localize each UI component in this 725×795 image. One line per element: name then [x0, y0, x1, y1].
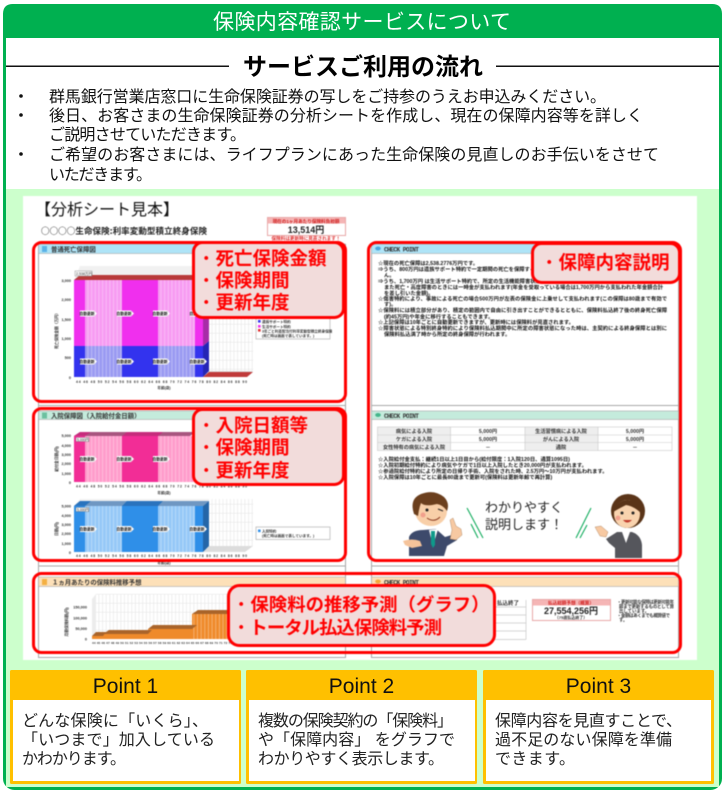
- panel: check point 1: ☆上記保障は10年ごとに自動更新できますが、更新時には保険料が見直されます。: [378, 318, 574, 326]
- title bar: 保険内容確認サービスについて: [213, 11, 511, 34]
- coverage table: 5,000円: [479, 436, 497, 443]
- point 2 card: [246, 670, 477, 784]
- panel: check point 3: CHECK POINT: [384, 580, 419, 586]
- point 1 card: かわかります。: [22, 750, 126, 768]
- coverage table: 女性特有の病気による入院: [383, 443, 446, 451]
- coverage table: ケガによる入院: [396, 435, 433, 443]
- side note: ・金額はあくまでも概算値で: [617, 612, 671, 619]
- monthly premium box: [268, 218, 346, 242]
- hospital notes: ☆入院保障は10年ごとに最長80歳まで更新可(保険料は更新年齢で再計算): [378, 473, 552, 481]
- icon: businesswoman: [595, 494, 645, 558]
- analysis sheet sample: [23, 196, 697, 660]
- chart: hospital blue: 年齢(歳): [157, 560, 171, 565]
- renewal tags: 自動更新: [189, 311, 205, 316]
- chart: hospital blue: 0: [69, 551, 71, 555]
- hospital notes: ☆入院給付金支払：継続1日以上1日目から(給付限度：1入院120日、通算1095日): [378, 455, 570, 463]
- chart: hospital pink: 4,000: [61, 444, 71, 448]
- total premium box: 27,554,256円: [544, 606, 598, 616]
- coverage table: [378, 427, 672, 451]
- point 2 card: わかりやすく表示します。: [258, 750, 444, 768]
- legend: hospital: (死亡時は画面で表しています。): [262, 533, 315, 538]
- chart: death coverage: 500: [65, 356, 71, 360]
- chart: hospital blue: 日額(円): [54, 521, 59, 536]
- hospital notes: ☆入院初期給付特約により病気やケガで1日以上入院したとき20,000円が支払われます。: [378, 461, 587, 469]
- chart: death coverage: 0: [69, 376, 71, 380]
- chart: hospital pink: 44 46 48 50 52 54 56 58 60 62 64 66 68 70 72 74 76 78 80 82 84 86 88 90: [76, 484, 247, 488]
- panel: check point 1: ☆傷害特約により、事故による死亡の場合500万円が左表の保険金に上乗せして支払われます(この保障は80歳まで有効で: [378, 294, 667, 302]
- renewal tags: [79, 310, 207, 364]
- chart: premium trend: 0: [85, 638, 87, 642]
- point 3 card: できます。: [495, 750, 575, 768]
- coverage table: 病気による入院: [396, 427, 433, 435]
- callout: death benefit: ・保険期間: [197, 270, 290, 291]
- chart: death coverage: 年齢(歳): [157, 385, 171, 390]
- chart: hospital blue: 5,000: [61, 504, 71, 508]
- sheet subtitle: ○○○○生命保険:利率変動型積立終身保険: [41, 225, 207, 237]
- point 3 card: 過不足のない保障を準備: [495, 731, 672, 749]
- renewal tags: 自動更新: [152, 359, 168, 364]
- renewal tags: 自動更新: [152, 311, 168, 316]
- panel: check point 2: [372, 411, 678, 481]
- coverage table: がんによる入院: [543, 435, 580, 443]
- coverage table: 通院: [556, 443, 567, 451]
- point 1 card: Point 1: [93, 675, 158, 698]
- panel: check point 1: CHECK POINT: [384, 246, 419, 254]
- bullet list: 群馬銀行営業店窓口に生命保険証券の写しをご持参のうえお申込みください。: [49, 88, 606, 106]
- coverage table: 5,000円: [626, 436, 644, 443]
- chart: death coverage: 死亡保険金額（万円）: [54, 311, 59, 349]
- total premium box: 払込総額予想（概算）: [548, 600, 594, 606]
- callout: premium forecast: ・トータル払込保険料予測: [232, 617, 442, 638]
- bullet list: ご希望のお客さまには、ライフプランにあった生命保険の見直しのお手伝いをさせて: [49, 146, 659, 164]
- accent lines: [467, 508, 591, 538]
- callout: hospital benefit: ・保険期間: [197, 437, 290, 458]
- panel: death coverage header: 普通死亡保障図: [51, 244, 96, 254]
- panel outlines: [38, 244, 679, 658]
- legend: hospital: 入院特約: [262, 528, 277, 534]
- panel: death coverage header: [38, 244, 346, 254]
- coverage table: 生活習慣病による入院: [535, 427, 588, 435]
- callout: premium forecast: [228, 586, 494, 646]
- panel: check point 1: ん。: [384, 272, 395, 279]
- chart: premium trend: 50,000: [75, 627, 87, 631]
- chart: death coverage: 1,500: [61, 318, 71, 322]
- callout: death benefit: ・更新年度: [197, 292, 290, 313]
- chart: hospital pink: 3,000: [61, 453, 71, 457]
- bullet list: [19, 88, 659, 184]
- chart: hospital pink: 給付金日額(円): [54, 446, 59, 472]
- coverage table: －: [632, 445, 638, 451]
- legend: death coverage: 生活サポート特約: [262, 324, 291, 329]
- callout: hospital benefit: ・入院日額等: [197, 415, 308, 436]
- chart: premium trend: [64, 594, 296, 645]
- monthly premium box: 現在の1ヶ月あたり保険料負担額: [273, 218, 340, 225]
- point 3 card: 保障内容を見直すことで、: [495, 712, 682, 730]
- sheet label: 【分析シート見本】: [35, 201, 179, 219]
- coverage table: －: [485, 445, 491, 451]
- panel: check point 1: また死亡・高度障害のときには一時金が支払われます(年金を受取っている場合は1,700万円から支払われた年金額合計: [384, 283, 664, 291]
- title bar: [3, 4, 722, 38]
- monthly premium box: 保険料は更新時に見直されます！: [272, 235, 340, 242]
- renewal tags: 自動更新: [189, 359, 205, 364]
- point 2 card: 複数の保険契約の「保険料」: [258, 712, 453, 730]
- chart: death coverage: 3,000: [61, 279, 71, 283]
- coverage table: 5,000円: [626, 428, 644, 435]
- chart: hospital blue: 自動更新: [152, 526, 168, 532]
- legend: death coverage: 3年ごと利差配当付利率変動型積立終身保険: [262, 328, 333, 334]
- callout: coverage explanation: ・保障内容説明: [540, 252, 670, 273]
- red highlight frames: [34, 242, 680, 652]
- panel: check point 1: ⇒うち、800万円は遺族サポート特約で一定期間の死亡を保障するもので、保険期間満了時の満期金はありませ: [378, 265, 641, 273]
- panel: check point 1: ☆障害状態による特別終身特約により保険料払込期間中に所定の障害状態になった時は、主契約による終身保障とは別に: [378, 324, 667, 332]
- payment table: 払込終了: [497, 599, 519, 607]
- panel: premium trend header: [38, 577, 346, 586]
- point 2 card: や「保障内容」 をグラフで: [258, 731, 455, 749]
- panel: check point 1: ☆現在の死亡保障は2,538.2776万円です。: [378, 259, 478, 267]
- point 2 card: Point 2: [329, 675, 394, 698]
- point 1 card: 「いつまで」加入している: [22, 731, 215, 749]
- chart: hospital blue: 自動更新: [79, 526, 95, 532]
- panel: check point 2: CHECK POINT: [384, 413, 419, 420]
- chart: hospital pink: 自動更新: [152, 456, 168, 462]
- chart: hospital blue: 5,000円: [77, 508, 89, 512]
- panel: check point 3: [372, 577, 678, 640]
- side note: 出しています。: [619, 608, 649, 614]
- chart: hospital blue: 自動更新: [189, 526, 205, 532]
- chart: hospital blue: 2,000: [61, 532, 71, 536]
- speech text: わかりやすく: [485, 500, 563, 515]
- chart: death coverage: 2,538万円: [76, 272, 93, 276]
- chart: death coverage: 44 46 48 50 52 54 56 58 60 62 64 66 68 70 72 74 76 78 80 82 84 86 88 90: [76, 380, 247, 384]
- legend: death coverage: 遺族サポート特約: [262, 319, 291, 324]
- chart: hospital pink: 0: [69, 481, 71, 485]
- chart: hospital pink: 5,000: [61, 434, 71, 438]
- chart: hospital pink: 年齢(歳): [157, 490, 171, 495]
- chart: death coverage: [54, 266, 253, 390]
- chart: hospital pink: 1,000: [61, 472, 71, 476]
- callout: death benefit: [194, 242, 344, 318]
- legend: death coverage: (死亡時は画面で表しています。): [262, 333, 315, 338]
- speech text: [485, 500, 563, 532]
- side note: 齢まで更新するものとして算: [619, 603, 675, 610]
- bullet list: いただきます。: [49, 166, 152, 184]
- total premium box: [532, 600, 610, 620]
- point 1 card: [10, 670, 241, 784]
- renewal tags: 自動更新: [116, 359, 132, 364]
- panel: check point 1: [372, 244, 678, 338]
- point 3 card: Point 3: [566, 675, 631, 698]
- chart: hospital pink: 自動更新: [79, 456, 95, 462]
- callout: hospital benefit: [194, 410, 344, 484]
- chart: premium trend: 100,000: [73, 616, 87, 620]
- renewal tags: 自動更新: [79, 311, 95, 316]
- panel: check point 1: ⇒うち、1,700万円 は生活サポート特約で、所定の生活機能障害状態になった場合に年金が支払われます。: [378, 277, 630, 285]
- chart: hospital blue: 3,000: [61, 523, 71, 527]
- renewal tags: 自動更新: [116, 311, 132, 316]
- bullet list: ご説明させていただきます。: [49, 126, 246, 144]
- chart: hospital pink: 自動更新: [116, 456, 132, 462]
- hospital notes: ☆参過院給付特約により所定の日帰り手術、入院をされた時、2.5万円～10万円が支払われます。: [378, 467, 608, 475]
- panel: check point 1: す)。: [384, 301, 396, 308]
- callout: coverage explanation: [532, 244, 680, 282]
- chart: death coverage: 1,000: [61, 337, 71, 341]
- legend: death coverage: [256, 316, 333, 339]
- panel: check point 1: (約45万円)や年金に移行することもできます。: [384, 312, 493, 320]
- hospital notes: [378, 455, 608, 481]
- monthly premium box: 13,514円: [288, 225, 324, 235]
- legend: hospital: [256, 527, 330, 540]
- panel: premium trend header: １ヵ月あたりの保険料推移予想: [52, 578, 142, 586]
- chart: hospital blue: 4,000: [61, 514, 71, 518]
- chart: premium trend: 150,000: [73, 606, 87, 610]
- point 3 card: [483, 670, 714, 784]
- speech text: 説明します！: [485, 517, 563, 532]
- chart: hospital blue: [54, 499, 253, 565]
- panel: check point 1: 保険料払込満了時から所定の終身保障が行われます。: [384, 330, 510, 338]
- heading: service flow: サービスご利用の流れ: [243, 53, 483, 81]
- panel: check point 1: を差し引いた金額)。: [384, 289, 433, 297]
- total premium box: （75歳払込終了）: [555, 614, 587, 620]
- side note: す。: [619, 616, 627, 624]
- chart: hospital pink: 2,000: [61, 462, 71, 466]
- panel: hospital coverage header: 入院保障図（入院給付金日額）: [51, 411, 140, 420]
- chart: hospital blue: 44 46 48 50 52 54 56 58 60 62 64 66 68 70 72 74 76 78 80 82 84 86 88 90: [76, 554, 247, 558]
- point 1 card: どんな保険に「いくら」、: [22, 712, 208, 730]
- icon: businessman: [403, 492, 462, 556]
- side note: [617, 598, 675, 624]
- callout: death benefit: ・死亡保険金額: [197, 248, 327, 269]
- chart: premium trend: 月額保険料額(円): [64, 607, 69, 637]
- callout: hospital benefit: ・更新年度: [197, 460, 290, 481]
- payment table: [490, 599, 526, 640]
- panel: hospital coverage header: [38, 411, 346, 420]
- callout: premium forecast: ・保険料の推移予測（グラフ）: [232, 594, 490, 615]
- light green body: [6, 189, 719, 787]
- chart: hospital blue: 1,000: [61, 542, 71, 546]
- panel: check point 1: ☆保険料には積立部分があり、積定の範囲内で自由に引き出すことができるとともに、保険料払込終了後の終身死亡保障: [378, 306, 668, 314]
- coverage table: 5,000円: [479, 428, 497, 435]
- chart: death coverage: 2,000: [61, 298, 71, 302]
- chart: hospital pink: [54, 432, 247, 495]
- chart: hospital pink: 5,000円: [77, 438, 89, 442]
- chart: hospital blue: 自動更新: [116, 526, 132, 532]
- renewal tags: 自動更新: [79, 359, 95, 364]
- chart: premium trend: 44 45 46 47 48 49 50 51 52 53 54 55 56 57 58 59 60 61 62 63 64 65 66 67 68 69 70 71 72 73: [92, 641, 232, 645]
- bullet list: 後日、お客さまの生命保険証券の分析シートを作成し、現在の保障内容等を詳しく: [49, 107, 643, 125]
- side note: ・更新可能な保障は更新可能年: [617, 598, 675, 606]
